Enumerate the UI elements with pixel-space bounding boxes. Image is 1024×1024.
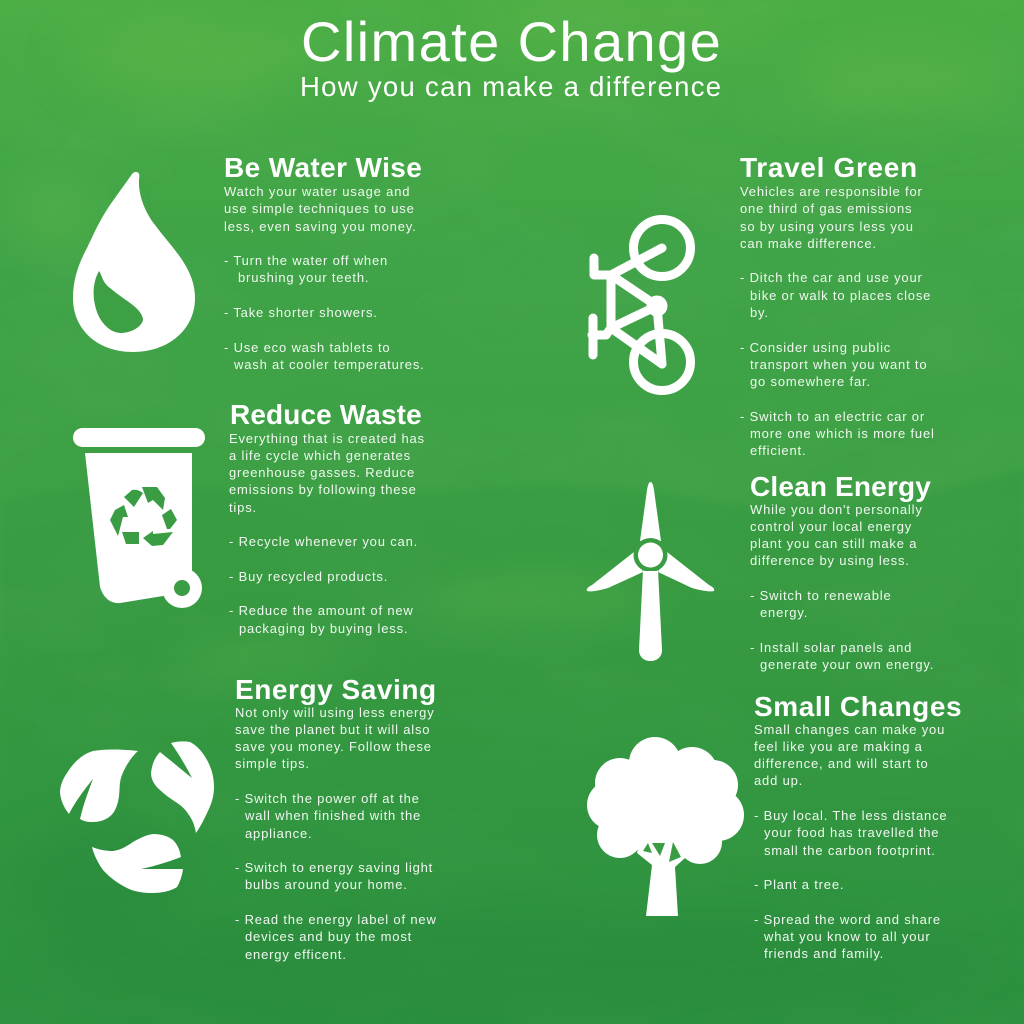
- text: travel tips: Vehicles are responsible for one third of gas emissions so by using yours less you can make difference. - Ditch the car and use your bike or walk to places close by. - Consider using public transport when you want to go somewhere far. - Switch to an electric car or more one which is more fuel efficient.: [740, 184, 935, 458]
- heading: reduce waste: Reduce Waste: [230, 399, 422, 430]
- panel: reduce waste: [229, 399, 425, 636]
- heading: travel green: Travel Green: [740, 152, 918, 183]
- text: waste tips: Everything that is created has a life cycle which generates greenhouse gasses. Reduce emissions by following these tips. - Recycle whenever you can. - Buy recycled products. - Reduce the amount of new packaging by buying less.: [229, 430, 425, 636]
- icon: three leaves: [60, 741, 214, 893]
- text: energy source tips: While you don't personally control your local energy plant you can still make a difference by using less. - Switch to renewable energy. - Install solar panels and generate your own energy.: [750, 502, 934, 672]
- panel: energy saving: [235, 674, 437, 962]
- title: [300, 10, 722, 102]
- icon: tree: [587, 737, 744, 916]
- icon: recycling bin: [73, 428, 205, 608]
- heading: small changes: Small Changes: [754, 691, 962, 722]
- heading: energy saving: Energy Saving: [235, 674, 437, 705]
- icon: bicycle: [588, 215, 695, 395]
- subtitle: How you can make a difference: [300, 71, 722, 102]
- text: small change tips: Small changes can make you feel like you are making a difference, and will start to add up. - Buy local. The less distance your food has travelled the small the carbon footprint. - Plant a tree. - Spread the word and share what you know to all your friends and family.: [754, 722, 947, 961]
- main heading: Climate Change: [301, 10, 722, 73]
- icon: water drop: [73, 172, 195, 352]
- heading: clean energy: Clean Energy: [750, 471, 931, 502]
- panel: clean energy: [750, 471, 934, 672]
- panel: small changes: [754, 691, 962, 961]
- text: energy tips: Not only will using less energy save the planet but it will also save you money. Follow these simple tips. - Switch the power off at the wall when finished with the appliance. - Switch to energy saving light bulbs around your home. - Read the energy label of new devices and buy the most energy efficent.: [235, 704, 437, 962]
- icon: wind turbine: [586, 482, 714, 661]
- text: water tips: Watch your water usage and use simple techniques to use less, even saving you money. - Turn the water off when brushing your teeth. - Take shorter showers. - Use eco wash tablets to wash at cooler temperatures.: [224, 184, 425, 372]
- heading: be water wise: Be Water Wise: [224, 152, 422, 183]
- panel: travel green: [740, 152, 935, 458]
- panel: be water wise: [224, 152, 425, 372]
